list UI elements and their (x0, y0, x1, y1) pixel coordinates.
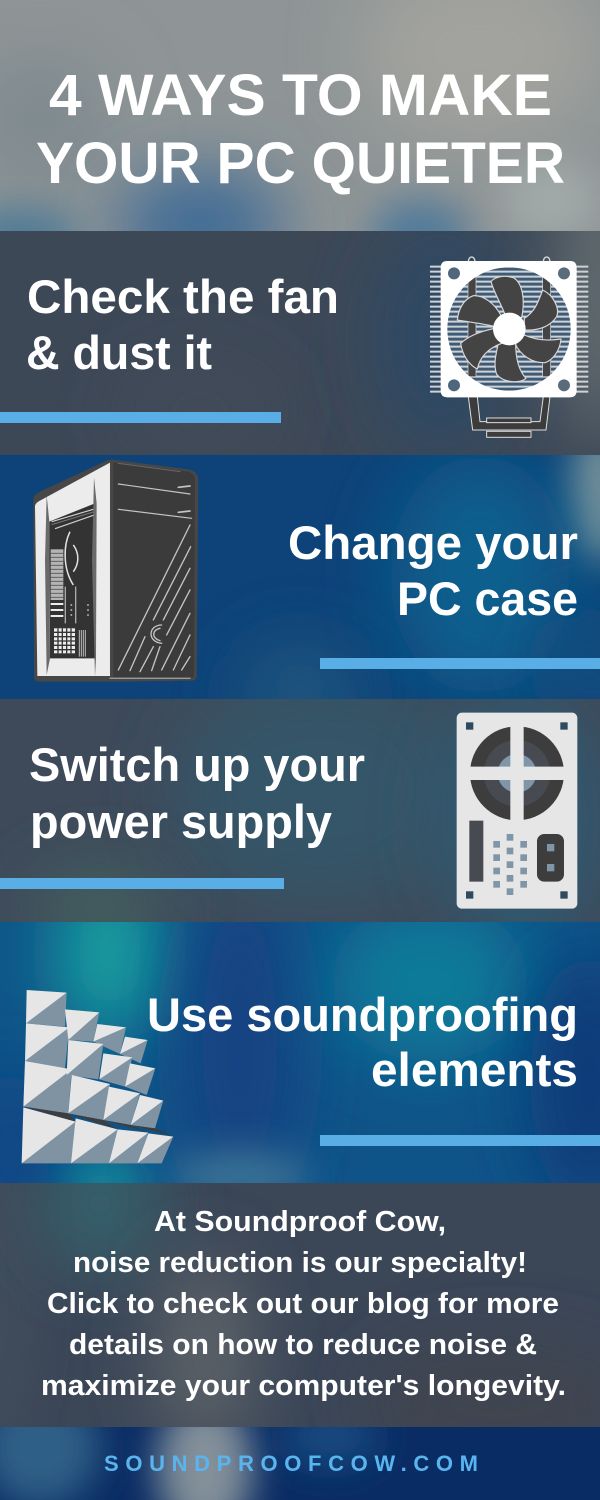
text block: Click to check out our blog for more (47, 1288, 559, 1320)
icon: PC tower (33, 460, 198, 682)
panel: change your PC case (0, 425, 600, 745)
accent bar (320, 658, 600, 669)
heading: power supply (30, 795, 332, 848)
heading: Check the fan (27, 270, 339, 323)
heading (147, 988, 578, 1096)
icon: power supply unit (457, 713, 577, 909)
heading (26, 270, 339, 379)
heading: PC case (397, 572, 578, 625)
accent bar (320, 1135, 600, 1146)
heading: elements (371, 1043, 578, 1096)
icon: cooling fan (430, 257, 588, 437)
heading: Change your (288, 516, 578, 569)
heading: & dust it (26, 326, 212, 379)
text block: noise reduction is our specialty! (73, 1247, 527, 1279)
text block (41, 1206, 566, 1402)
title: YOUR PC QUIETER (36, 131, 565, 196)
panel: closing message (0, 1133, 600, 1463)
text block: maximize your computer's longevity. (41, 1370, 566, 1402)
heading: Use soundproofing (147, 988, 578, 1041)
text block: details on how to reduce noise & (69, 1329, 537, 1361)
accent bar (0, 878, 284, 889)
panel: header (0, 0, 600, 280)
text block: At Soundproof Cow, (154, 1206, 446, 1238)
panel: power supply (0, 669, 600, 949)
title (36, 63, 565, 196)
panel: website footer (0, 1387, 600, 1500)
accent bar (0, 412, 281, 423)
website address: SOUNDPROOFCOW.COM (104, 1451, 478, 1476)
panel: check the fan (0, 141, 600, 461)
heading (288, 516, 578, 625)
icon: acoustic foam (22, 990, 173, 1163)
title: 4 WAYS TO MAKE (49, 63, 552, 128)
heading (29, 738, 365, 848)
panel: soundproofing (0, 867, 600, 1242)
heading: Switch up your (29, 738, 365, 791)
